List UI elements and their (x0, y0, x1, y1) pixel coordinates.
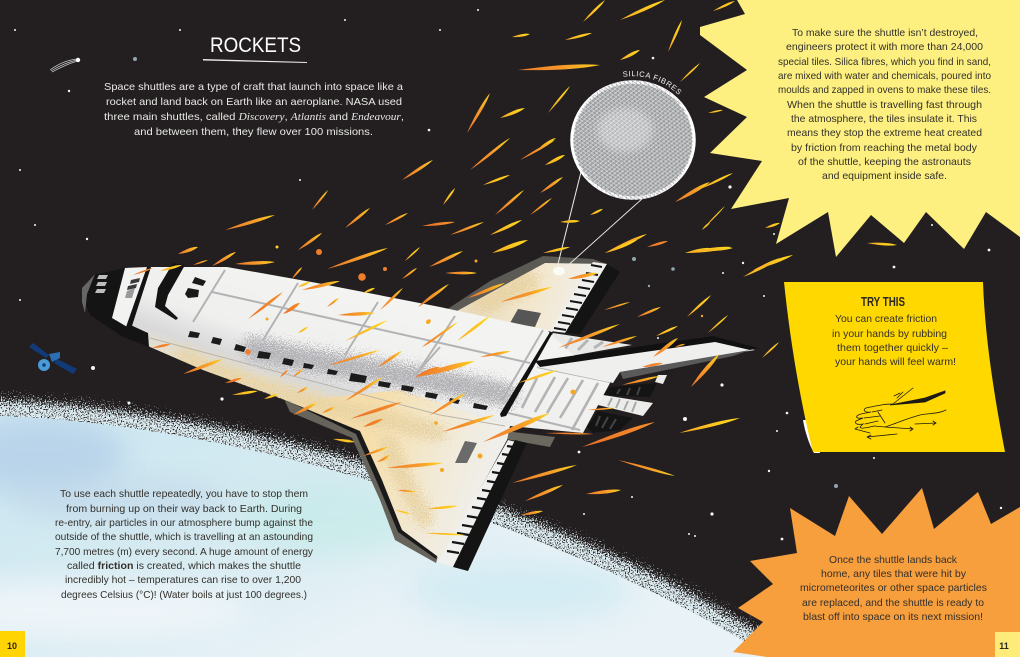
panel: yellow burst (700, 0, 1020, 257)
lower wing (290, 390, 510, 562)
burst text: tile replacement: are replaced, and the shuttle is ready to (802, 597, 984, 609)
note text (832, 313, 956, 368)
icon: rubbing hands (855, 388, 946, 439)
cockpit windows (185, 277, 206, 298)
burst text: silica tiles: moulds and zapped in ovens to make these tiles. (778, 84, 991, 96)
burst text: silica tiles: are mixed with water and chemicals, poured into (778, 70, 991, 82)
heat speckle (170, 345, 520, 530)
lower wing panel (455, 441, 477, 463)
note text: in your hands by rubbing (832, 328, 947, 340)
upper wing (457, 262, 620, 334)
space shuttle (82, 256, 758, 571)
intro text block: three main shuttles, called Discovery , Atlantis and Endeavour , (104, 111, 404, 123)
burst text: silica tiles: engineers protect it with more than 24,000 (786, 41, 983, 53)
OMS pod (537, 333, 632, 362)
windshield (155, 263, 185, 320)
text block: friction: 7,700 metres (m) every second. A huge amount of energy (55, 546, 314, 558)
tile highlight (553, 266, 565, 276)
page number 10: 10 (7, 641, 17, 651)
burst text: silica tiles: of the shuttle, keeping the astronauts (798, 156, 971, 168)
label: silica fibres: SILICA FIBRES (623, 70, 682, 94)
text block: friction: called friction is created, which makes the shuttle (67, 560, 301, 572)
text block: friction: from burning up on their way back to Earth. During (66, 503, 302, 515)
earth (0, 416, 770, 657)
burst text: tile replacement: blast off into space on its next mission! (803, 611, 983, 623)
panel: try this note (784, 282, 1005, 453)
burst text: silica tiles: When the shuttle is travelling fast through (787, 99, 982, 111)
text block: friction: degrees Celsius (°C)! (Water boils at just 100 degrees.) (61, 589, 307, 601)
icon: satellite (29, 343, 77, 374)
burst text: silica tiles: and equipment inside safe. (822, 170, 947, 182)
note text: You can create friction (835, 313, 937, 325)
intro text block: rocket and land back on Earth like an aeroplane. NASA used (106, 96, 402, 108)
text block: friction: outside of the shuttle, which is travelling at an astounding (55, 531, 313, 543)
icon: comet (50, 58, 80, 72)
burst text: tile replacement (800, 554, 987, 623)
text block: friction (55, 488, 314, 601)
atmosphere speckle band (0, 410, 770, 652)
text block: friction: To use each shuttle repeatedly, you have to stop them (60, 488, 308, 500)
note text: them together quickly – (837, 342, 948, 354)
engines (587, 375, 667, 433)
burst text: silica tiles: To make sure the shuttle isn’t destroyed, (792, 27, 978, 39)
black divider (500, 332, 552, 417)
upper wing leading edge (446, 256, 607, 312)
fuselage (126, 267, 610, 433)
intro text block: and between them, they flew over 100 missions. (134, 126, 373, 138)
burst text: silica tiles: special tiles. Silica fibres, which you find in sand, (778, 56, 991, 68)
panel lines (150, 270, 610, 430)
text block: friction: re-entry, air particles in our atmosphere bump against the (55, 517, 313, 529)
burst text: silica tiles: the atmosphere, the tiles insulate it. This (791, 113, 977, 125)
silica fibres magnified circle (570, 70, 696, 200)
lower elevon tiles (438, 440, 527, 571)
page number 11: 11 (999, 641, 1009, 651)
intro text block: Space shuttles are a type of craft that launch into space like a (104, 81, 403, 93)
burst text: tile replacement: micrometeorites or other space particles (800, 582, 987, 594)
intro text block (104, 81, 404, 138)
hot particle dots (245, 246, 703, 472)
tail fin (535, 336, 758, 383)
nose (82, 267, 151, 347)
note text: your hands will feel warm! (835, 356, 956, 368)
burst text: tile replacement: Once the shuttle lands back (829, 554, 958, 566)
body flap (497, 430, 555, 447)
burst text: silica tiles: by friction from reaching the metal body (791, 142, 978, 154)
stars (14, 9, 1002, 540)
title: ROCKETS (210, 34, 301, 57)
text block: friction: incredibly hot – temperatures can rise to over 1,200 (65, 574, 301, 586)
page number 11 (995, 632, 1020, 657)
fuselage windows (188, 331, 488, 410)
page number 10 (0, 631, 25, 657)
silica tile connector lines (557, 172, 643, 268)
burst text: tile replacement: home, any tiles that were hit by (821, 568, 967, 580)
heading: try this: TRY THIS (861, 295, 905, 309)
burst text: silica tiles (778, 27, 991, 182)
burst text: silica tiles: means they stop the extreme heat created (787, 127, 982, 139)
flame streaks (133, 0, 897, 536)
panel: orange burst (733, 488, 1020, 657)
lower wing leading edge (284, 399, 438, 563)
